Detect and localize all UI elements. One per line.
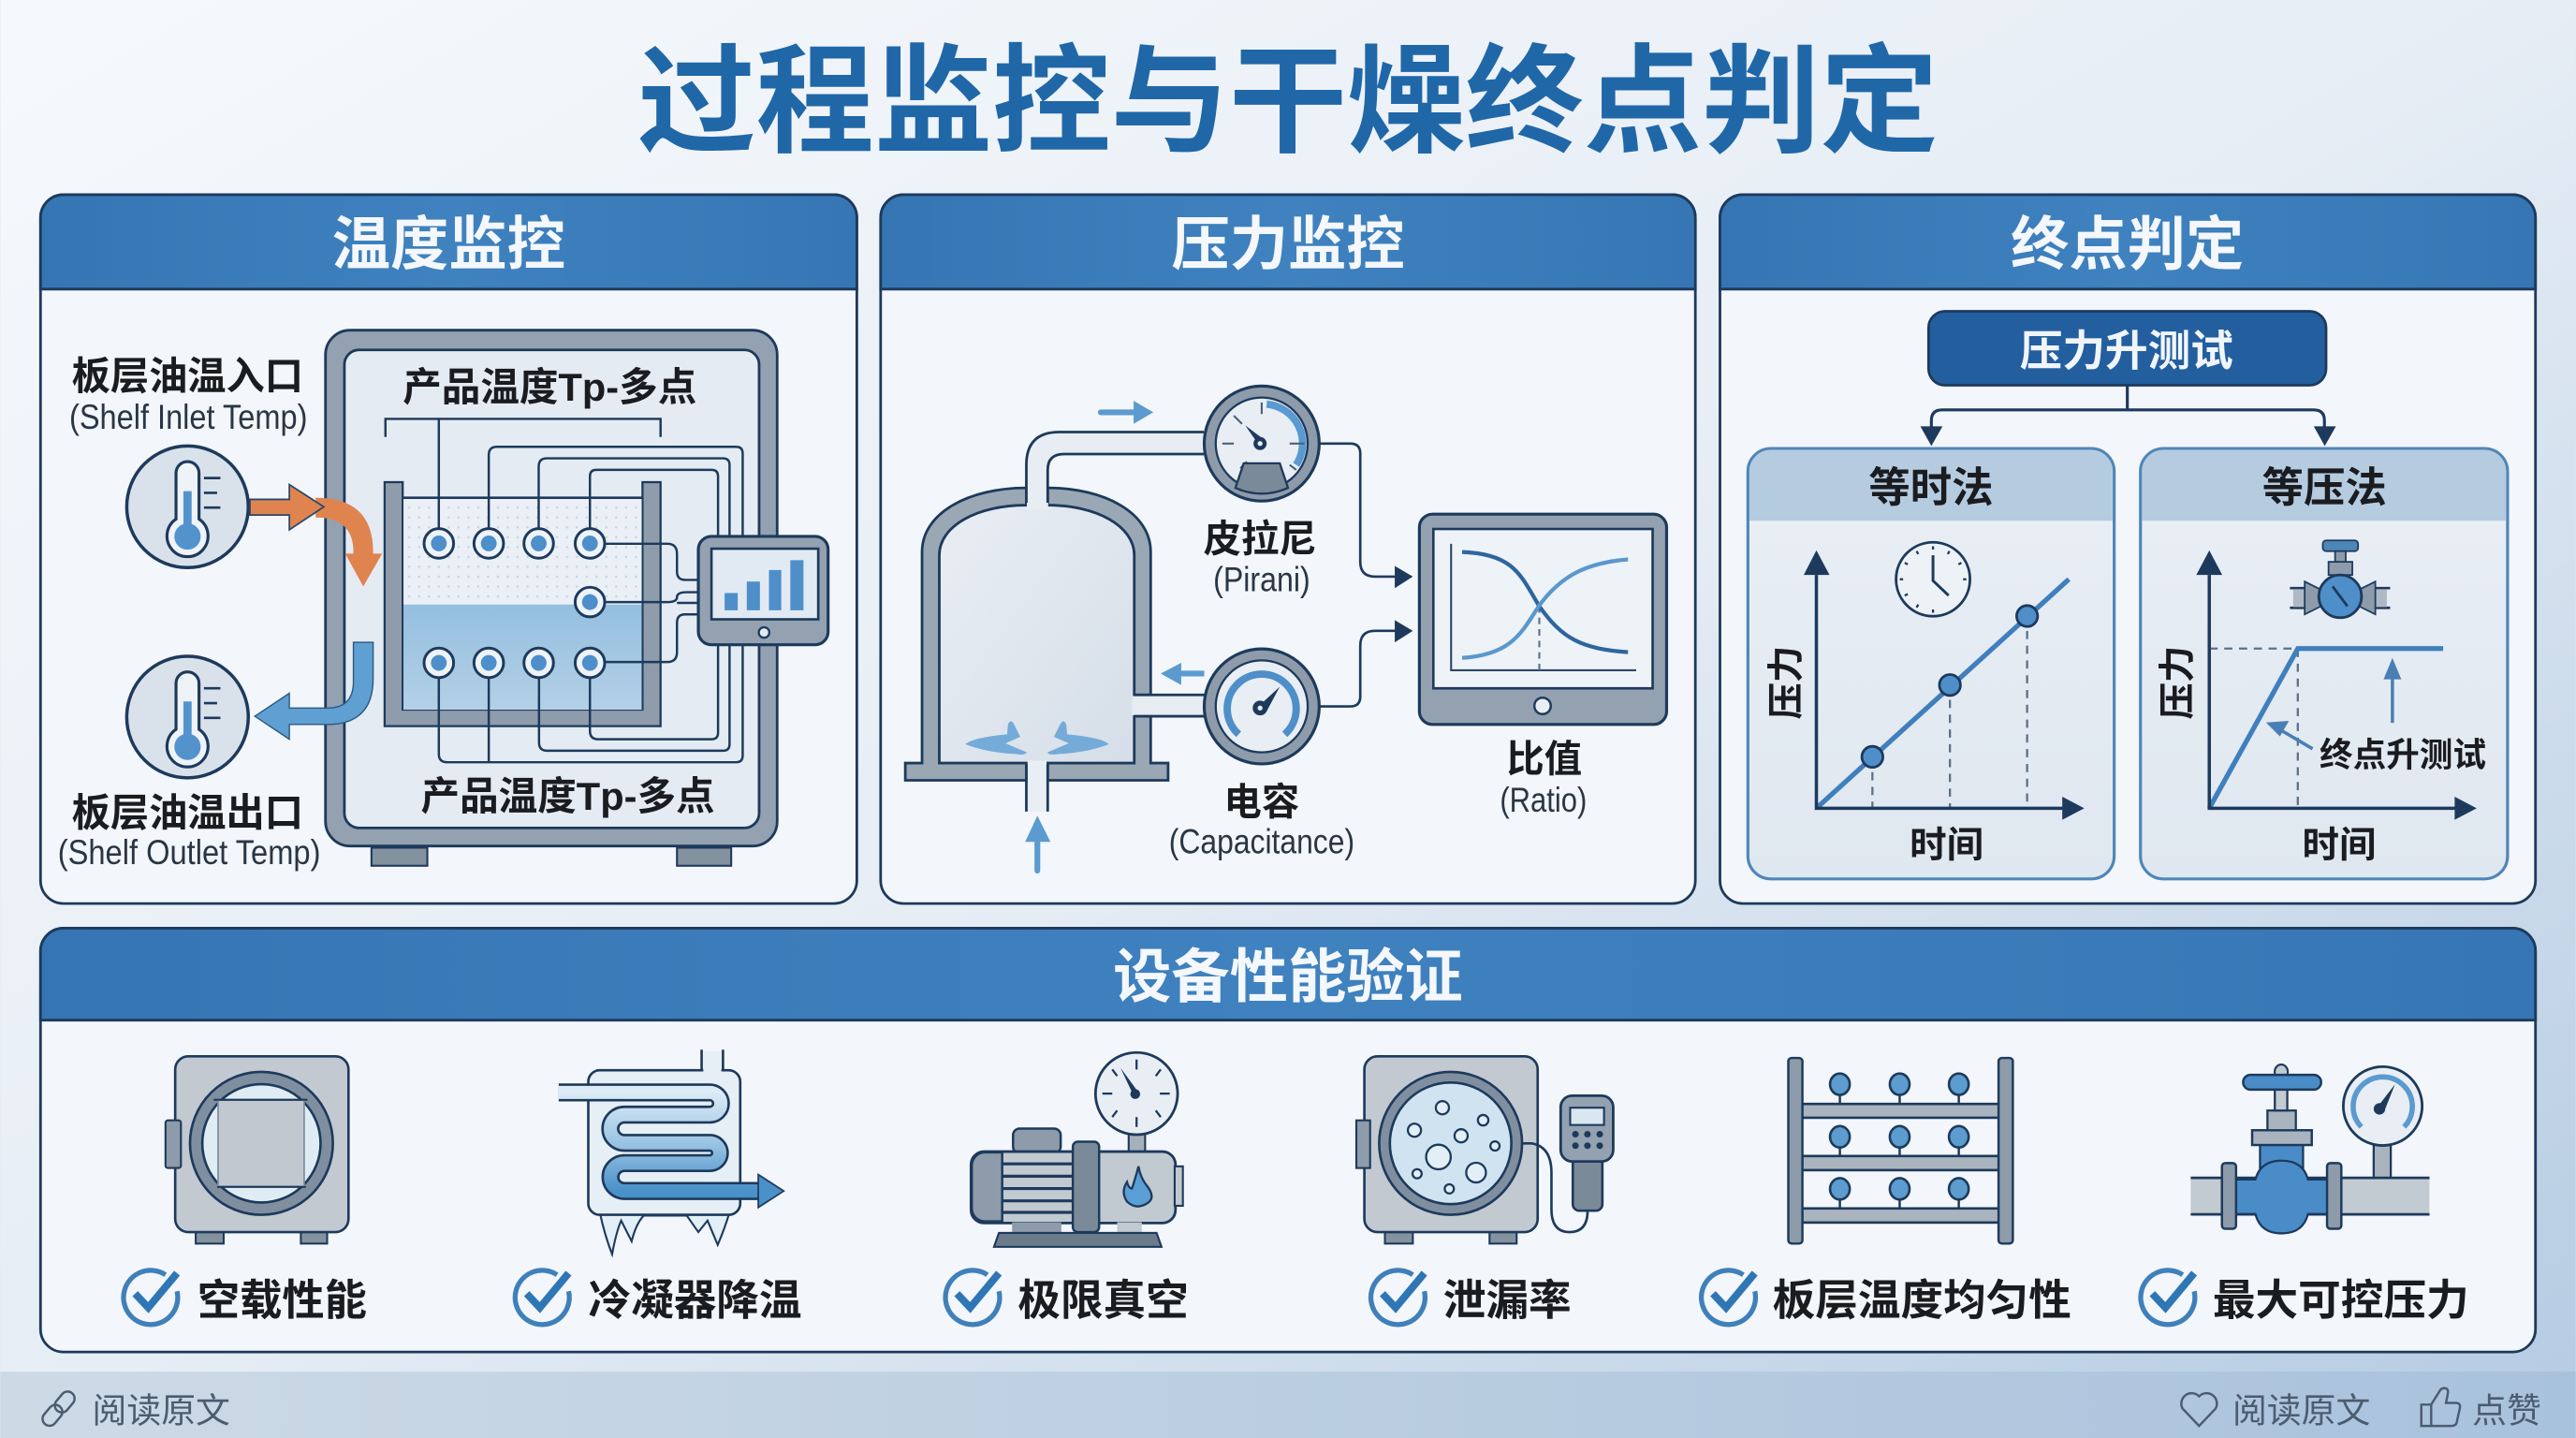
panel: 压力监控	[881, 195, 1695, 903]
check badge	[515, 1270, 569, 1325]
axis label: 时间: 时间	[2303, 825, 2377, 866]
label: 极限真空	[1017, 1277, 1189, 1325]
footer: like: 点赞	[2472, 1392, 2541, 1431]
icon: shelf rack	[1788, 1058, 2012, 1243]
arrow: capacitance to monitor	[1319, 620, 1412, 707]
arrow: hot oil in	[250, 485, 382, 586]
icon: condenser coil	[559, 1049, 783, 1255]
icon: data monitor	[698, 536, 828, 645]
item: 泄漏率	[1356, 1056, 1613, 1325]
connector arrows	[1921, 385, 2336, 446]
label: 空载性能	[198, 1277, 367, 1325]
axis label: 压力: 压力	[2157, 646, 2198, 720]
footer: read original right: 阅读原文	[2232, 1392, 2370, 1431]
sensors: product temperature points	[424, 529, 605, 678]
button: 压力升测试	[1928, 312, 2326, 385]
monitor: ratio curve	[1419, 514, 1666, 725]
label: 比值: 比值	[1506, 738, 1582, 781]
icon: clock	[1896, 542, 1970, 616]
footer: like	[2422, 1388, 2541, 1431]
label: 板层油温出口: 板层油温出口	[72, 792, 303, 835]
check badge	[2141, 1270, 2195, 1325]
label: 冷凝器降温	[588, 1277, 802, 1325]
label: 板层油温入口: (Shelf Inlet Temp)	[69, 398, 307, 436]
button: 压力升测试: 压力升测试	[2020, 327, 2233, 374]
label: 板层油温出口	[58, 792, 320, 872]
icon: empty chamber	[166, 1056, 348, 1243]
arrow: oil out	[255, 642, 373, 740]
icon: leak test chamber	[1356, 1056, 1613, 1243]
vessel: product chamber	[905, 432, 1205, 812]
label: 电容: (Capacitance)	[1169, 823, 1354, 861]
icon: vacuum pump	[971, 1052, 1183, 1247]
footer: read original left: 阅读原文	[93, 1392, 230, 1431]
item: 极限真空	[945, 1052, 1189, 1325]
icon: inlet thermometer	[126, 446, 248, 567]
check badge	[124, 1270, 178, 1325]
sub-panel: 等时法	[1748, 448, 2115, 879]
chart: 压力-时间 constant pressure	[2196, 550, 2477, 820]
check badge	[945, 1270, 1000, 1325]
arrows: flow direction	[1025, 401, 1205, 871]
label: 板层油温入口	[69, 355, 307, 436]
label: 等压法: 等压法	[2262, 465, 2387, 511]
annotation: 终点升测试: 终点升测试	[2320, 737, 2486, 774]
arrow: Pirani to monitor	[1319, 444, 1412, 588]
footer band	[0, 1372, 2576, 1438]
item: 最大可控压力	[2141, 1064, 2469, 1325]
icon: control valve with gauge	[2190, 1064, 2430, 1233]
chart: 压力-时间 linear rise	[1804, 550, 2085, 820]
check badge	[1702, 1270, 1755, 1325]
gauge: Pirani	[1205, 386, 1319, 501]
tray with product	[385, 482, 661, 726]
heading: 温度监控: 温度监控	[332, 213, 565, 278]
icon: outlet thermometer	[126, 656, 248, 778]
heading: 压力监控: 压力监控	[1171, 213, 1405, 278]
sensor wiring	[386, 418, 742, 762]
panel: 终点判定	[1720, 195, 2536, 903]
label: 电容: 电容	[1224, 780, 1299, 823]
label: 产品温度 bottom: 产品温度Tp-多点	[421, 774, 715, 818]
sub-panel: 等压法	[2141, 448, 2508, 879]
label: 泄漏率	[1443, 1277, 1572, 1325]
label: 比值: (Ratio)	[1500, 781, 1587, 819]
icon: valve	[2290, 540, 2390, 618]
item: 冷凝器降温	[515, 1049, 802, 1325]
label: 比值	[1500, 738, 1587, 819]
chamber: freeze dryer body	[326, 330, 777, 866]
footer: read original left	[39, 1388, 230, 1431]
label: 板层温度均匀性	[1773, 1277, 2071, 1325]
check badge	[1371, 1270, 1425, 1325]
heading: 设备性能验证: 设备性能验证	[1113, 946, 1463, 1010]
item: 板层温度均匀性	[1702, 1058, 2071, 1325]
panel: 温度监控	[40, 195, 856, 903]
label: 电容	[1169, 780, 1354, 861]
axis label: 时间: 时间	[1910, 825, 1983, 866]
label: 产品温度 top: 产品温度Tp-多点	[402, 365, 696, 409]
item: 空载性能	[124, 1056, 367, 1325]
axis label: 压力: 压力	[1766, 646, 1808, 720]
panel: 设备性能验证	[40, 928, 2536, 1352]
title: 过程监控与干燥终点判定	[637, 37, 1939, 169]
label: 最大可控压力	[2213, 1277, 2469, 1325]
label: 皮拉尼	[1204, 518, 1317, 599]
label: 皮拉尼: (Pirani)	[1213, 561, 1310, 599]
label: 皮拉尼: 皮拉尼	[1204, 518, 1317, 561]
label: 板层油温出口: (Shelf Outlet Temp)	[58, 833, 320, 872]
label: 板层油温入口: 板层油温入口	[72, 355, 303, 398]
label: 等时法: 等时法	[1868, 465, 1994, 511]
heading: 终点判定: 终点判定	[2011, 213, 2244, 278]
gauge: capacitance	[1205, 649, 1319, 764]
